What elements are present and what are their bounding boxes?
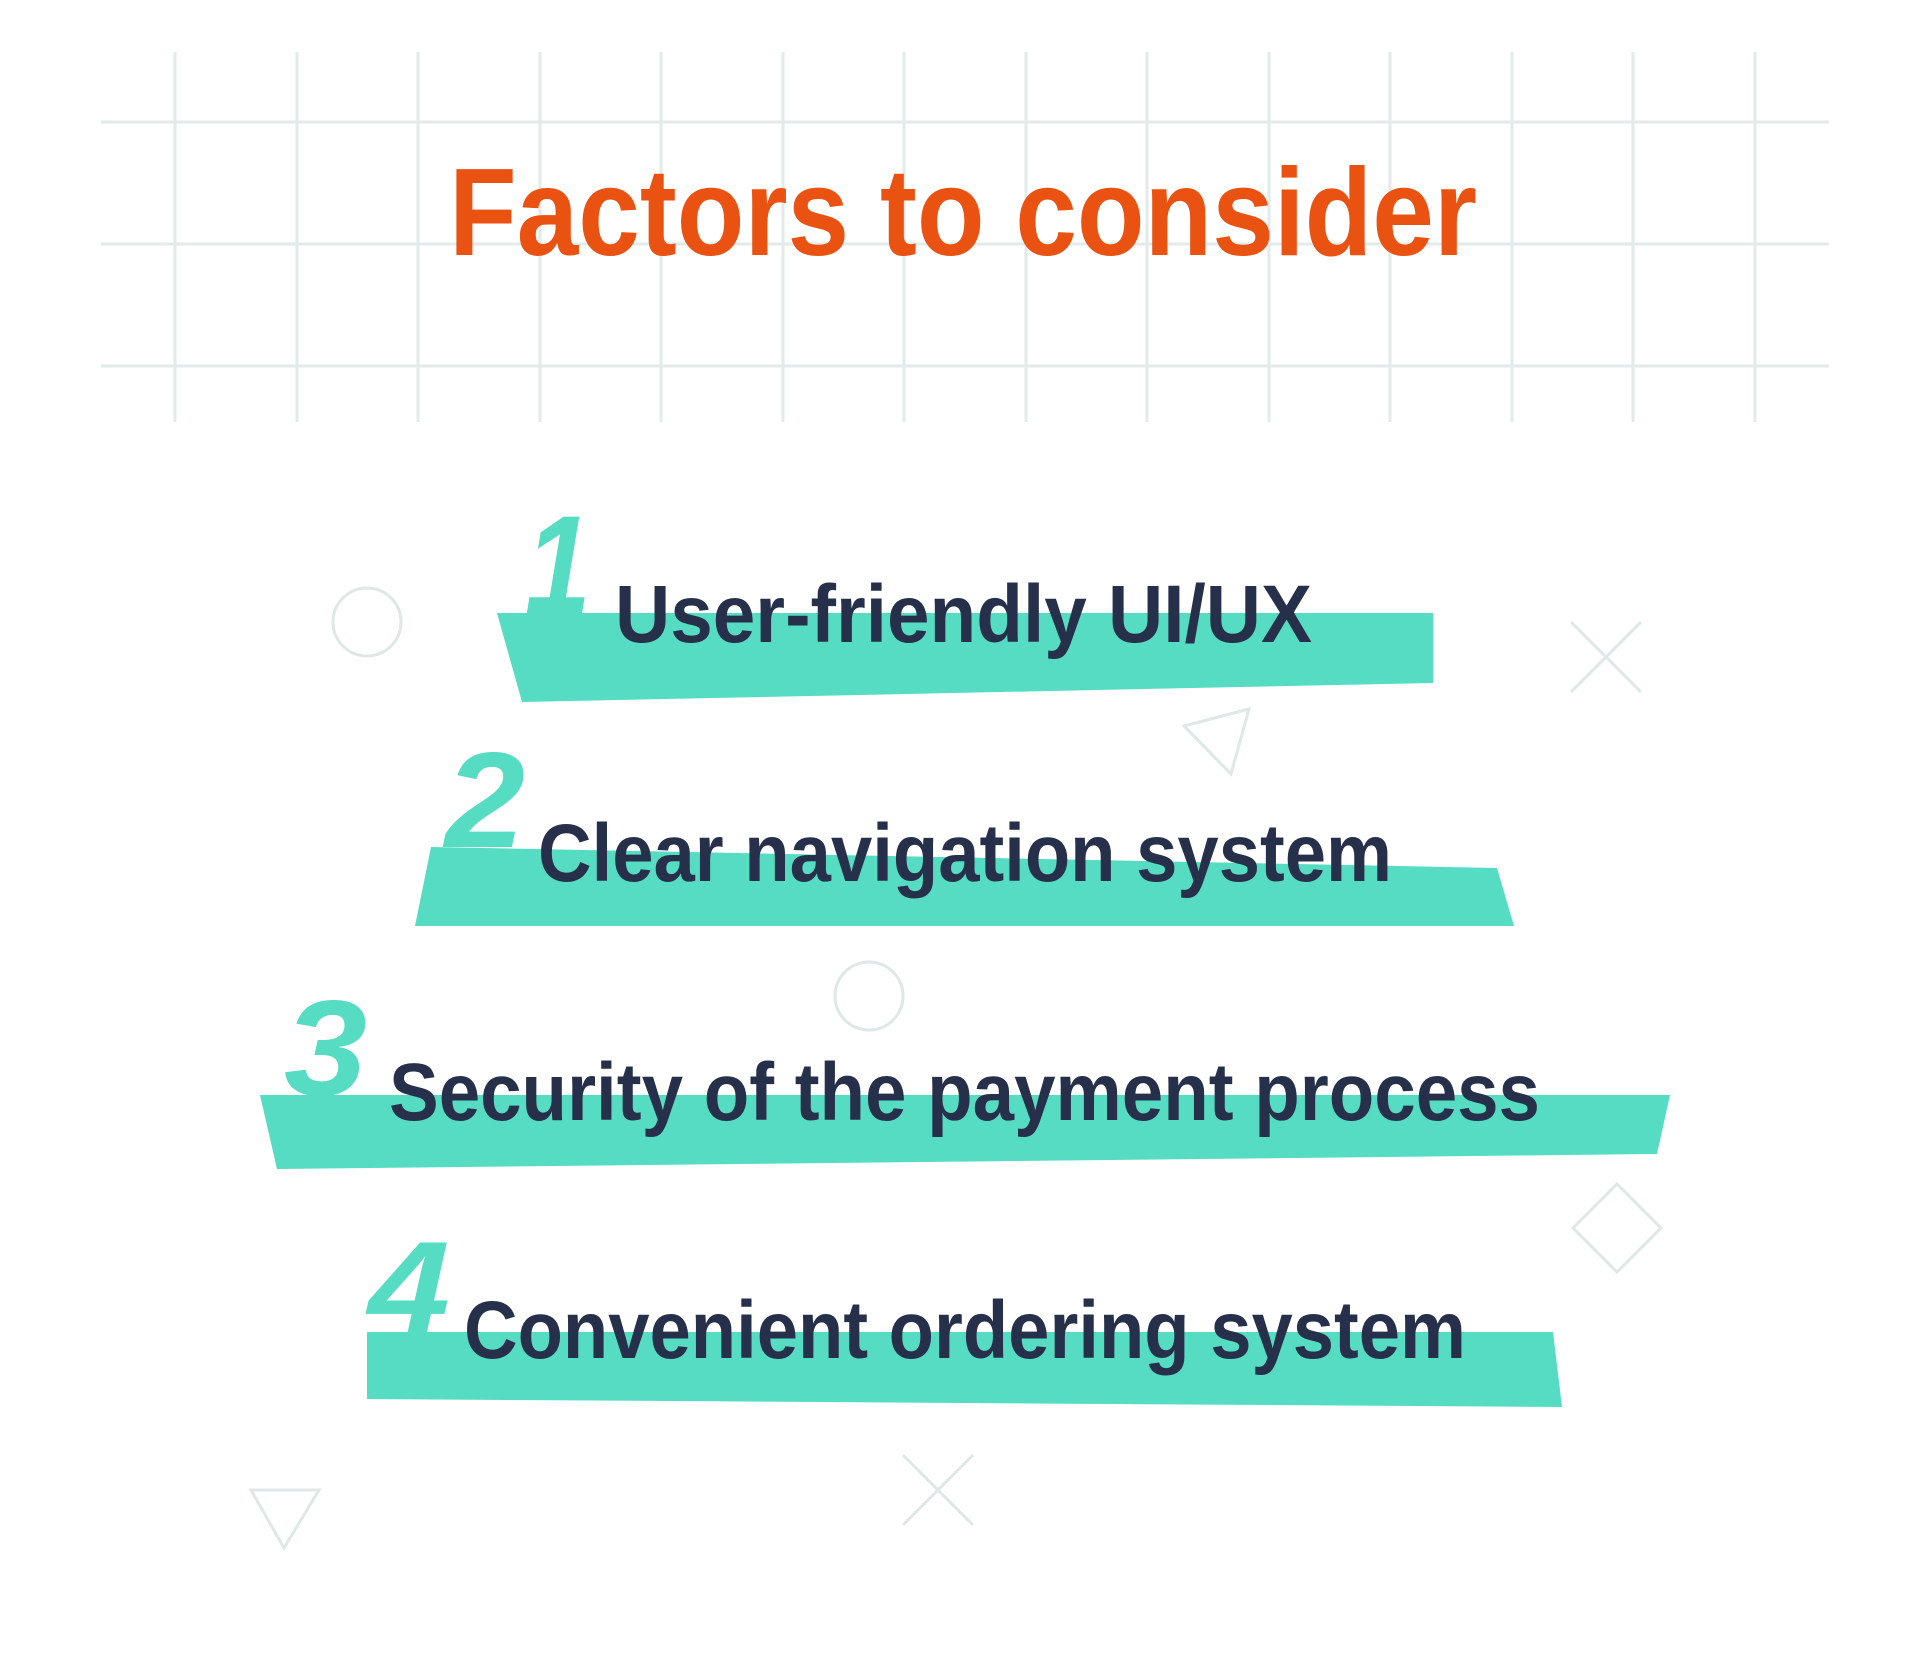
item 3 — [260, 972, 1670, 1169]
title: Factors to consider — [449, 144, 1477, 282]
item 1: 1 — [525, 486, 591, 643]
decoration: shapes — [251, 588, 1661, 1548]
item 1 — [497, 486, 1433, 702]
item 3: Security of the payment process — [389, 1047, 1540, 1138]
item 2: 2 — [442, 724, 525, 876]
item 2: Clear navigation system — [538, 808, 1392, 899]
item 4: Convenient ordering system — [464, 1285, 1466, 1376]
item 4: 4 — [365, 1214, 450, 1360]
item 4 — [365, 1214, 1562, 1407]
item 1: User-friendly UI/UX — [615, 569, 1312, 660]
item 2 — [415, 724, 1514, 926]
item 3: 3 — [284, 972, 367, 1124]
